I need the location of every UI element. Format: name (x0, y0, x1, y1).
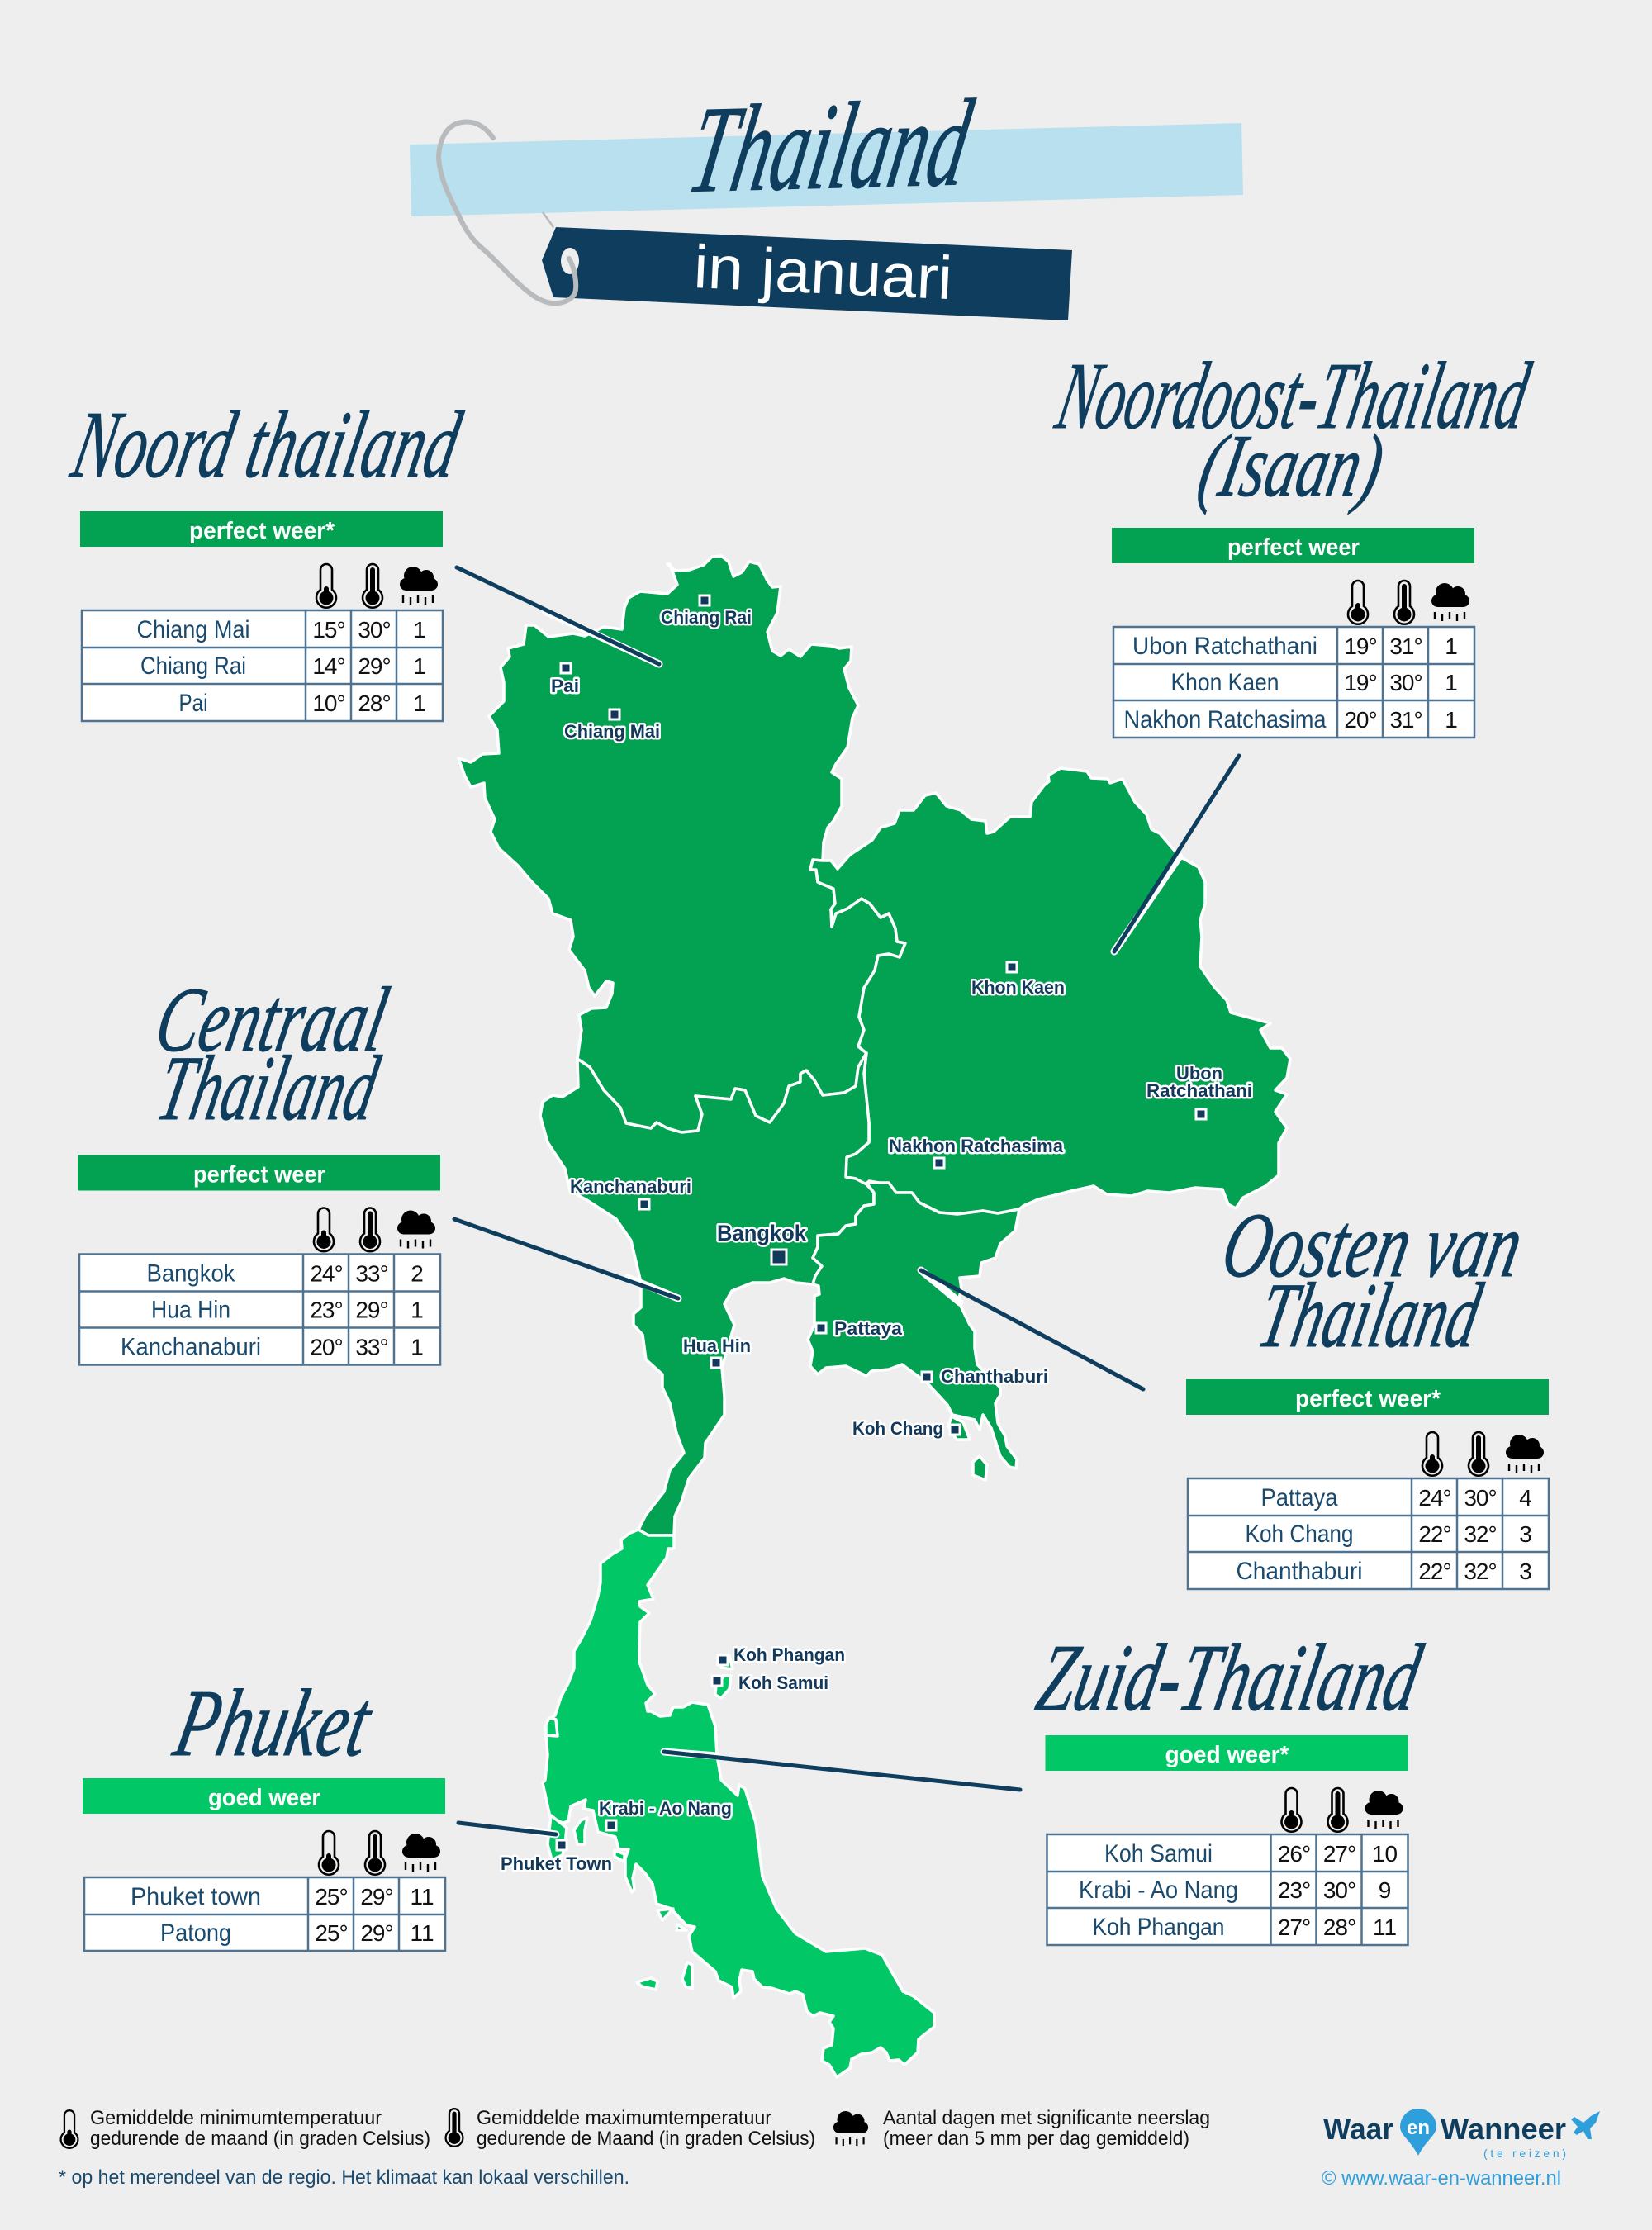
region: south (543, 1530, 934, 2077)
panel: Noordoost-Thailand (1112, 528, 1474, 738)
climate table: 14° (312, 653, 345, 679)
climate table: 22° (1418, 1559, 1451, 1584)
climate table: 4 (1519, 1485, 1532, 1511)
icon: rain days (833, 2111, 868, 2146)
weather icons (1422, 1432, 1544, 1476)
heading: Noord thailand: Noord thailand (64, 391, 469, 498)
climate table: 25° (315, 1920, 348, 1946)
map city labels: Pai (551, 676, 579, 696)
climate table: Koh Samui (1104, 1840, 1213, 1867)
map city labels: Koh Samui (738, 1672, 828, 1693)
map city labels: Kanchanaburi (570, 1176, 691, 1197)
climate table: 1 (411, 1297, 424, 1323)
map city labels (501, 595, 1252, 1874)
climate table: 1 (1445, 707, 1458, 733)
rating bar (1112, 528, 1474, 563)
climate table: 1 (413, 617, 426, 643)
island: Koh Kood (973, 1456, 987, 1480)
legend text: minimum: Gemiddelde minimumtemperatuur (90, 2107, 382, 2129)
map city labels: Chiang Rai (661, 607, 752, 628)
climate table: Khon Kaen (1171, 669, 1279, 696)
climate table: 11 (410, 1884, 434, 1910)
region: east (808, 1183, 1019, 1468)
rating bar (80, 511, 443, 547)
heading: Phuket: Phuket (166, 1670, 382, 1777)
weather icons (319, 1831, 440, 1875)
legend (61, 2107, 1210, 2150)
heading: Oosten van Thailand: Oosten van (1214, 1194, 1531, 1297)
climate table: 29° (360, 1920, 393, 1946)
climate table: Nakhon Ratchasima (1123, 706, 1327, 733)
rating bar (78, 1155, 440, 1191)
legend text: minimum: gedurende de maand (in graden Celsius) (90, 2128, 430, 2150)
region: northeast (810, 768, 1290, 1214)
region: central (540, 1053, 874, 1535)
climate table: Patong (160, 1919, 231, 1947)
climate table: 32° (1464, 1559, 1497, 1584)
climate table: Hua Hin (151, 1297, 230, 1323)
climate table: Krabi - Ao Nang (1079, 1877, 1238, 1904)
climate table: 23° (1278, 1877, 1310, 1903)
climate table: Phuket town (131, 1883, 261, 1910)
logo: Waar en Wanneer: Waar (1323, 2112, 1393, 2146)
logo: Waar en Wanneer (1323, 2109, 1600, 2160)
climate table: 31° (1389, 707, 1422, 733)
climate table: Kanchanaburi (121, 1333, 261, 1361)
panel: Zuid-Thailand (1046, 1735, 1408, 1945)
website link: © www.waar-en-wanneer.nl (1322, 2167, 1561, 2190)
rating bar: goed weer* (1165, 1742, 1289, 1768)
climate table: 20° (310, 1335, 343, 1359)
panel: Centraal Thailand (78, 1155, 440, 1364)
south islands (546, 1656, 733, 1990)
leader lines (454, 567, 1239, 1834)
climate table: Pai (178, 690, 208, 717)
map city labels: Chanthaburi (941, 1366, 1048, 1387)
climate table (84, 1877, 445, 1951)
climate table: 30° (358, 617, 391, 643)
map city labels: Pattaya (834, 1318, 903, 1339)
heading: Oosten van Thailand (1214, 1194, 1531, 1367)
climate table: 27° (1278, 1914, 1310, 1940)
climate table: 20° (1344, 707, 1377, 733)
climate table: 29° (360, 1884, 393, 1910)
climate table (1047, 1834, 1408, 1945)
icon: maximum temperature (446, 2109, 463, 2147)
climate table: 9 (1379, 1877, 1391, 1903)
title text: Thailand (680, 74, 981, 219)
climate table: 30° (1323, 1877, 1355, 1903)
rating bar: perfect weer (193, 1161, 325, 1188)
map city labels: Khon Kaen (971, 977, 1065, 998)
climate table: Chiang Mai (137, 616, 249, 643)
panel: Phuket (83, 1778, 445, 1951)
climate table: Bangkok (147, 1260, 235, 1287)
rating bar: perfect weer (1227, 534, 1360, 561)
weather icons (1282, 1788, 1403, 1832)
climate table: Ubon Ratchathani (1132, 633, 1317, 660)
heading: Noordoost-Thailand (Isaan): (Isaan) (1191, 416, 1392, 515)
climate table: 11 (410, 1920, 434, 1946)
subtitle text: in januari (692, 232, 954, 312)
climate table: 1 (1445, 670, 1458, 695)
heading: Centraal Thailand (148, 969, 396, 1140)
map city labels: Koh Chang (852, 1418, 943, 1439)
climate table (1188, 1478, 1549, 1589)
map city labels: Nakhon Ratchasima (889, 1136, 1064, 1156)
legend text: rain (883, 2107, 1210, 2150)
footnote: * op het merendeel van de regio. Het klimaat kan lokaal verschillen. (59, 2166, 629, 2189)
climate table: 15° (312, 617, 345, 643)
heading: Centraal Thailand: Thailand (150, 1037, 387, 1140)
island: Koh Chang (948, 1416, 970, 1440)
climate table: 10° (312, 690, 345, 716)
legend text: rain: Aantal dagen met significante neerslag (883, 2107, 1210, 2129)
logo: Waar en Wanneer: en (1407, 2117, 1430, 2139)
climate table: 29° (358, 653, 391, 679)
heading: Noordoost-Thailand (Isaan) (1048, 343, 1538, 515)
climate table: Koh Chang (1246, 1521, 1353, 1548)
climate table: 25° (315, 1884, 348, 1910)
island: Phuket (548, 1815, 567, 1860)
climate table: 10 (1372, 1841, 1398, 1867)
climate table: 27° (1323, 1841, 1355, 1867)
climate table: 19° (1344, 670, 1377, 695)
map city labels: Bangkok (717, 1221, 807, 1245)
climate table: 32° (1464, 1521, 1497, 1547)
climate table: 29° (355, 1297, 388, 1323)
rating bar (1186, 1379, 1549, 1415)
climate table: Chiang Rai (140, 652, 246, 680)
map city labels: Hua Hin (683, 1336, 751, 1356)
rating bar (83, 1778, 445, 1814)
climate table: 28° (1323, 1914, 1355, 1940)
rating bar: goed weer (208, 1785, 320, 1811)
climate table: Pattaya (1260, 1484, 1338, 1511)
climate table: 22° (1418, 1521, 1451, 1547)
weather icons (316, 564, 438, 608)
climate table: 30° (1389, 670, 1422, 695)
climate table: 30° (1464, 1485, 1497, 1511)
climate table: 11 (1373, 1914, 1397, 1940)
map city labels: Krabi - Ao Nang (599, 1798, 732, 1819)
map city labels: Ubon (1176, 1063, 1222, 1084)
climate table: 19° (1344, 633, 1377, 659)
rating bar: perfect weer* (189, 518, 335, 544)
logo: Waar en Wanneer: (te reizen) (1483, 2147, 1566, 2160)
map city labels: Ratchathani (1146, 1080, 1252, 1101)
panel: Noord thailand (80, 511, 443, 721)
map city labels: Phuket Town (501, 1853, 612, 1874)
region: north (458, 556, 905, 1132)
weather icons (1348, 581, 1469, 624)
map city labels: Chiang Mai (564, 721, 660, 742)
climate table: 24° (310, 1260, 343, 1287)
climate table: 28° (358, 690, 391, 716)
legend text: maximum: Gemiddelde maximumtemperatuur (477, 2107, 771, 2129)
climate table: 31° (1389, 633, 1422, 659)
rating bar: perfect weer* (1295, 1386, 1441, 1412)
heading: Oosten van Thailand: Thailand (1251, 1264, 1489, 1367)
climate table: 1 (411, 1335, 424, 1359)
climate table: 2 (411, 1260, 424, 1287)
climate table: 26° (1278, 1841, 1310, 1867)
map city labels: Koh Phangan (733, 1644, 845, 1665)
climate table (82, 610, 443, 721)
climate table: Koh Phangan (1092, 1914, 1224, 1941)
title tag (410, 74, 1243, 320)
legend text: rain: (meer dan 5 mm per dag gemiddeld) (883, 2128, 1189, 2150)
climate table: 33° (355, 1260, 388, 1287)
legend text: maximum: gedurende de Maand (in graden Celsius) (477, 2128, 815, 2150)
rating bar (1046, 1735, 1408, 1771)
weather icons (314, 1208, 435, 1251)
climate table: 33° (355, 1335, 388, 1359)
climate table: Chanthaburi (1236, 1558, 1363, 1585)
climate table: 1 (413, 690, 426, 716)
climate table (79, 1254, 440, 1364)
heading: Centraal Thailand: Centraal (148, 969, 396, 1071)
icon: minimum temperature (61, 2110, 78, 2148)
climate table: 24° (1418, 1485, 1451, 1511)
climate table: 1 (413, 653, 426, 679)
legend text: maximum (477, 2107, 815, 2150)
climate table (1113, 627, 1474, 738)
legend text: minimum (90, 2107, 430, 2150)
panel: Oosten van Thailand (1186, 1379, 1549, 1589)
heading: Zuid-Thailand: Zuid-Thailand (1029, 1625, 1430, 1731)
climate table: 3 (1519, 1521, 1532, 1547)
map of Thailand (458, 556, 1290, 2077)
climate table: 3 (1519, 1559, 1532, 1584)
climate table: 23° (310, 1297, 343, 1323)
climate table: 1 (1445, 633, 1458, 659)
logo: Waar en Wanneer: Wanneer (1441, 2112, 1566, 2146)
